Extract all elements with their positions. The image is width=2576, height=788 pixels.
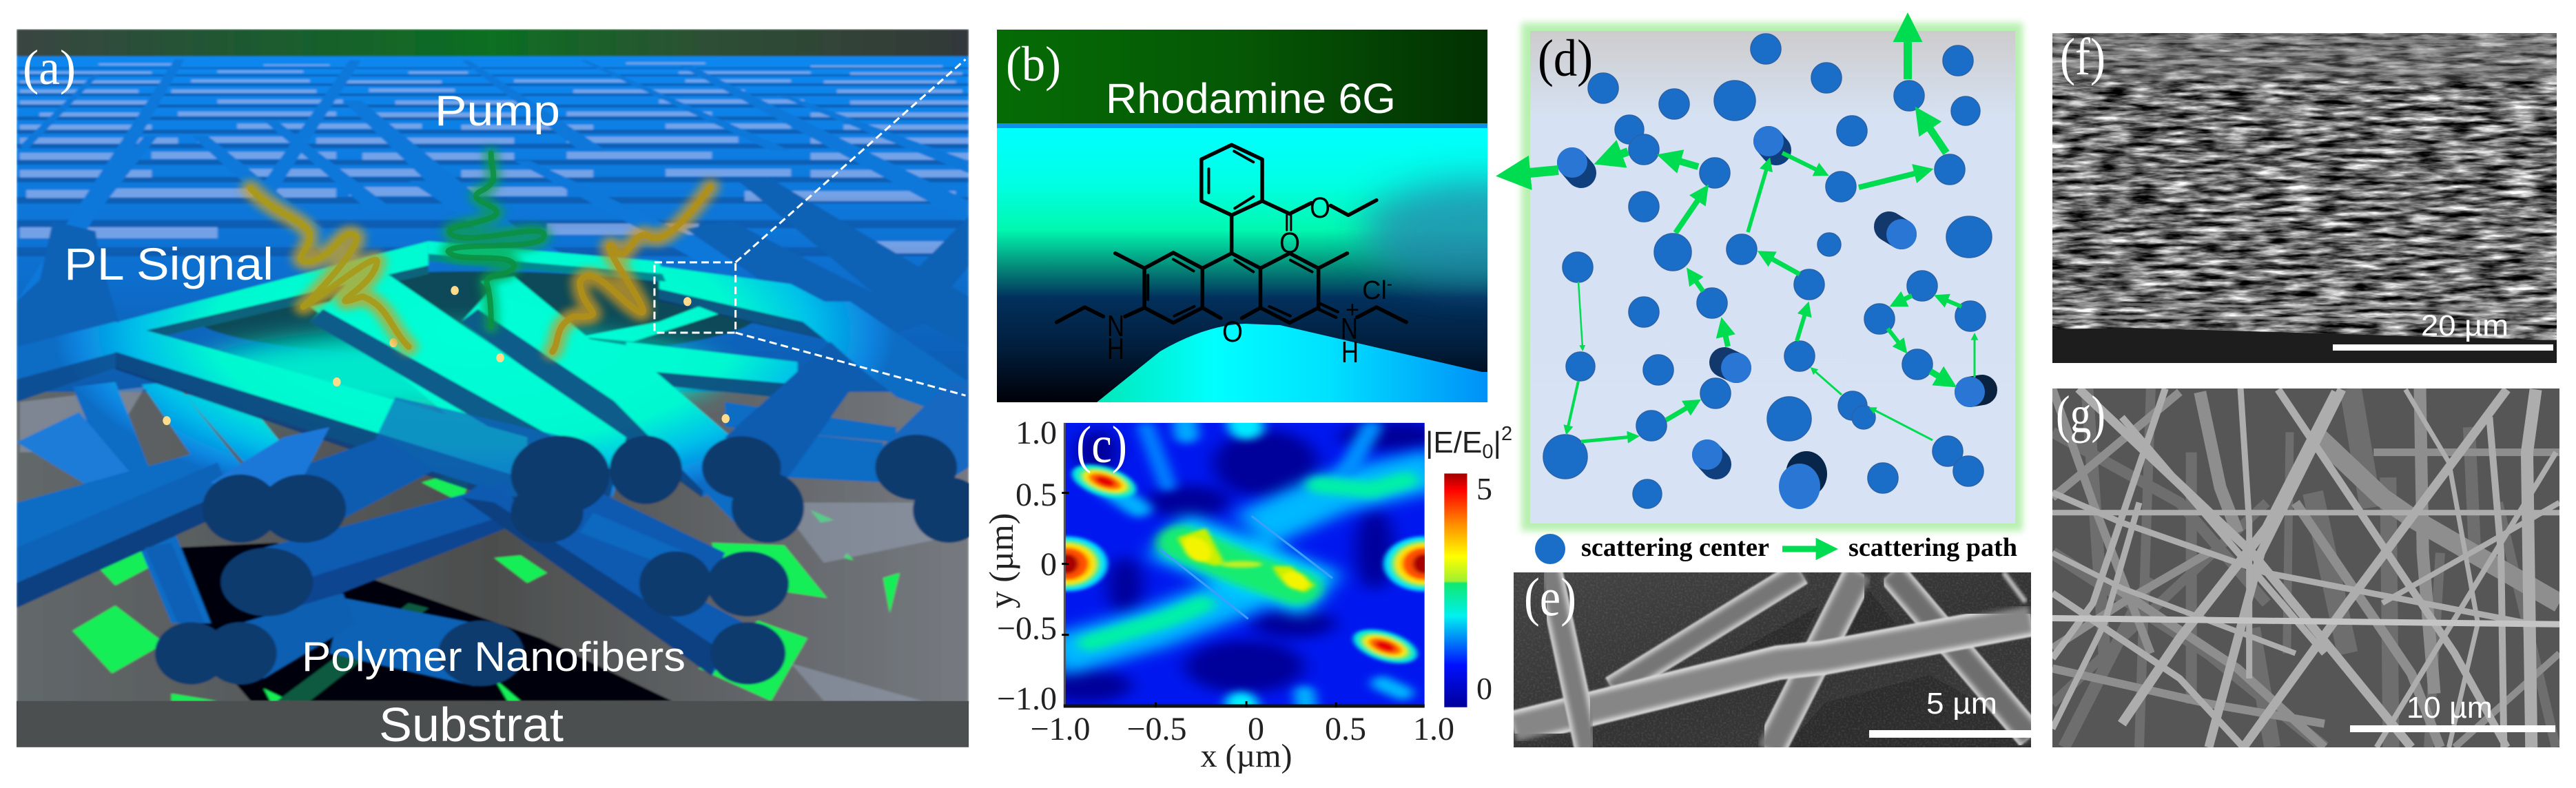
colour bar title: 0 [1482,441,1494,463]
panel a artwork: fibers on substrate [17,29,969,747]
blocked: dark interior [191,271,758,357]
panel background [1530,31,2015,523]
panel g: SEM top view [2052,386,2559,747]
SEM background and fibers [1514,568,2031,751]
scale bar 10 µm [2350,725,2555,732]
glowing fibers: middle layer [657,265,825,339]
heat map plot [1062,423,1467,708]
scale bar 20 µm [2333,344,2553,351]
y tick labels: −1.0 [997,681,1057,717]
atom labels: N [1107,309,1124,343]
x tick labels: 0.5 [1325,711,1366,747]
teal sheen on right [1343,158,1487,300]
cyan bump [1097,324,1487,402]
label: Pump: Pump [435,87,560,135]
colour bar title: | [1494,426,1501,459]
atom labels [1107,191,1392,369]
y tick labels: 0.5 [1016,477,1057,513]
x axis title: x (µm) [1201,738,1292,774]
atom labels: Cl [1362,276,1387,305]
atom labels: O [1279,227,1300,260]
green header strip [997,30,1487,123]
panel d: scattering schematic [1515,23,2023,564]
panel a: 3D nanofiber network [17,29,985,751]
scale text 20 µm: 20 µm [2421,309,2508,342]
atom labels: H [1107,332,1124,366]
scale bar 5 µm [1869,730,2031,738]
label: (g): (g) [2056,386,2105,444]
molecule structure [1054,143,1408,325]
panel b: Rhodamine 6G molecule [997,30,1596,402]
panel c: field intensity heat map [982,415,1512,774]
scattering centers [1543,34,1992,508]
label: (f): (f) [2060,28,2105,86]
zoom guide: dashed box and lines [655,59,965,395]
y tick labels: 0 [1040,546,1057,583]
y tick labels: −0.5 [997,610,1057,647]
y tick labels [997,415,1057,717]
front fibers [461,290,709,499]
label: (e): (e) [1524,567,1576,627]
atom labels: N [1341,312,1358,346]
label: PL Signal: PL Signal [64,238,274,289]
atom labels: - [1387,275,1392,293]
label: (c): (c) [1076,416,1127,474]
colour bar [1444,473,1467,707]
fiber end caps [155,435,985,686]
scale text 5 µm: 5 µm [1926,687,1997,720]
pump wave arrow [251,154,710,352]
label: (b): (b) [1006,37,1061,92]
SEM cross-section texture [2052,33,2557,363]
scale text 10 µm: 10 µm [2407,691,2493,725]
y tick labels: 1.0 [1016,415,1057,451]
x tick labels [1030,711,1454,747]
gold nanoparticles [163,286,730,425]
legend: scattering center icon [1535,534,1565,564]
SEM fibers image [2052,388,2559,747]
x tick labels: −1.0 [1030,711,1091,747]
left PL wave arrow [251,189,409,346]
gradient body [997,128,1487,402]
axes and ticks [1062,423,1425,707]
atom labels: H [1341,335,1359,369]
colour bar title: |E/E [1425,426,1482,459]
cylinder-shaped scattering centers [1557,126,1985,509]
scattering path arrows [1515,29,1975,442]
substrate bar [17,701,969,747]
blue separator [997,123,1487,128]
label: Polymer Nanofibers: Polymer Nanofibers [302,634,686,680]
label: Rhodamine 6G: Rhodamine 6G [1106,75,1396,122]
panel f: SEM cross-section [2052,28,2557,363]
y axis title: y (µm) [982,513,1020,608]
x tick labels: −0.5 [1126,711,1187,747]
right PL wave arrow [553,187,710,352]
legend: scattering center text: scattering center [1581,533,1769,562]
atom labels: O [1310,191,1330,225]
label: (d): (d) [1538,30,1593,87]
hot spots [1065,462,1425,665]
x tick labels: 1.0 [1413,711,1454,747]
panel e: SEM image of single fibers [1514,567,2031,751]
label: Substrat: Substrat [379,698,564,751]
colour bar min: 0 [1476,671,1492,706]
glow underlay [191,332,719,417]
label: (a): (a) [23,40,76,95]
legend: scattering path arrow [1782,546,1826,552]
legend: scattering path text: scattering path [1848,533,2017,562]
atom labels: + [1346,297,1359,323]
green glowing frame [1521,23,2023,531]
colour bar max: 5 [1476,471,1492,506]
colour bar title: 2 [1501,423,1512,445]
x tick labels: 0 [1248,711,1264,747]
atom labels: O [1222,315,1243,349]
